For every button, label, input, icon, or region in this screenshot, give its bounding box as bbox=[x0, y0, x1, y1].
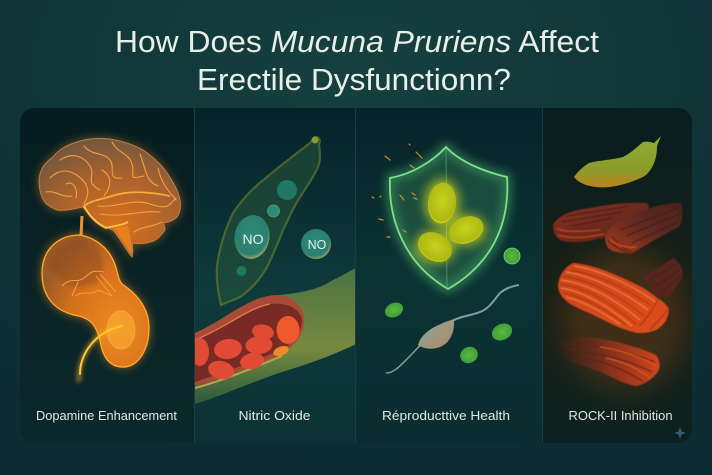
icon: three yellow seeds bbox=[413, 178, 488, 268]
panel: reproductive health bbox=[356, 108, 542, 443]
icon: sperm cell bbox=[386, 285, 519, 373]
title: How Does Mucuna Pruriens Affect bbox=[115, 24, 599, 59]
panel: dopamine enhancement bbox=[20, 108, 195, 443]
panel group bbox=[20, 108, 692, 443]
icon: green seeds bbox=[382, 248, 520, 366]
back dark bundle bbox=[643, 258, 683, 297]
label: nitric oxide: Nitric Oxide bbox=[238, 408, 310, 423]
icon: glowing brain bbox=[39, 138, 180, 257]
lower fading bundle bbox=[559, 337, 660, 386]
label: dopamine enhancement: Dopamine Enhancement bbox=[36, 408, 177, 423]
icon: nitric oxide bubble: NO bbox=[308, 238, 327, 252]
panel: ROCK-II inhibition bbox=[542, 108, 692, 443]
icon: sparkle mark bbox=[674, 427, 686, 439]
icon: connecting stalk bbox=[81, 216, 82, 236]
icon: blood vessel with red cells bbox=[191, 265, 360, 404]
label: ROCK-II inhibition: ROCK-II Inhibition bbox=[568, 408, 672, 423]
panel: nitric oxide bbox=[195, 108, 355, 420]
label: reproductive health: Réproducttive Health bbox=[382, 408, 510, 423]
icon: glowing shield bbox=[372, 144, 507, 289]
title: Erectile Dysfunctionn? bbox=[197, 62, 511, 97]
upper dark bundles bbox=[553, 203, 682, 253]
icon: seed pod with bubbles: NO bbox=[242, 231, 264, 247]
title bbox=[115, 24, 599, 97]
large bright bundle bbox=[558, 263, 669, 333]
icon: glowing kidney bbox=[42, 235, 149, 382]
icon: nitric oxide bubble bbox=[301, 229, 331, 259]
icon: muscle fibre bundles bbox=[553, 203, 683, 386]
icon: seed pod with bubbles bbox=[217, 136, 320, 305]
icon: green pod bbox=[574, 136, 661, 187]
